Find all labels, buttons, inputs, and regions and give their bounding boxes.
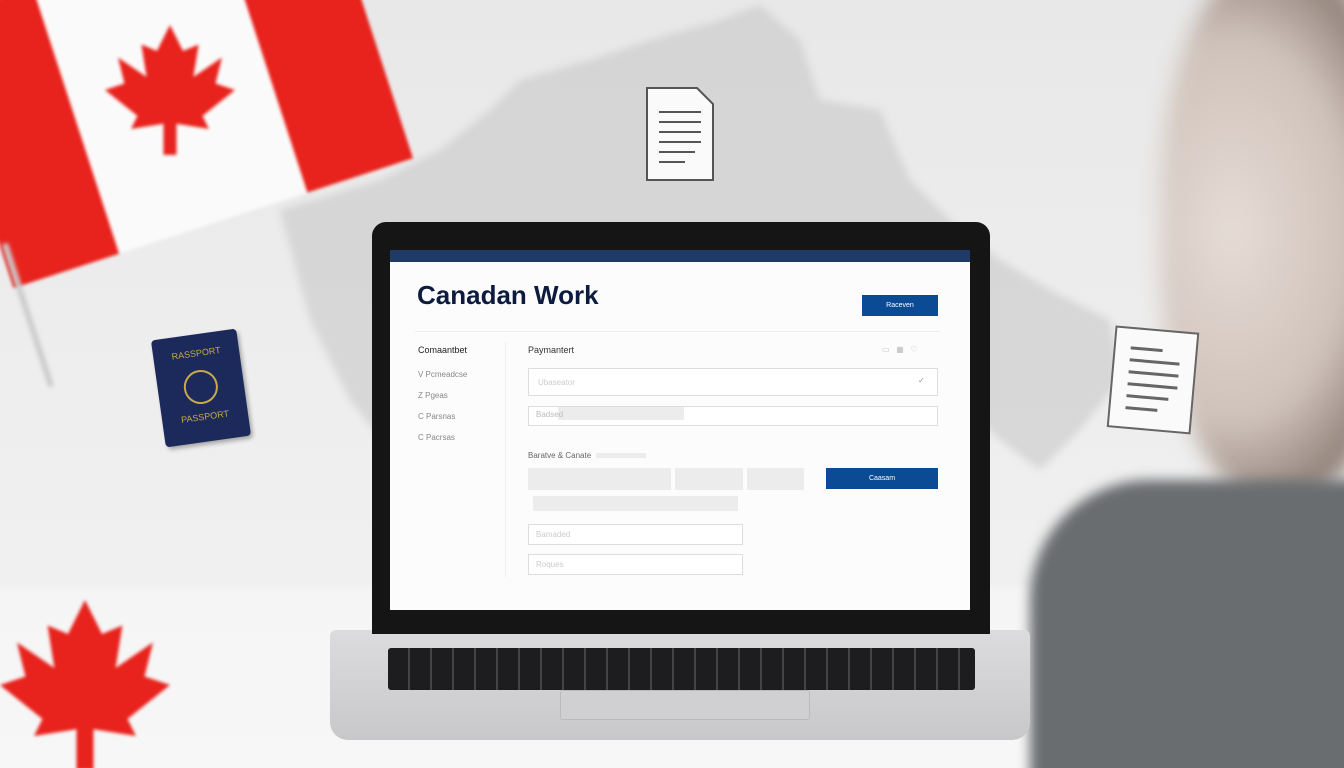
icon: passport: RASSPORT PASSPORT <box>171 345 230 425</box>
button top <box>862 295 938 316</box>
screen: V Pcmeadcse <box>418 370 467 379</box>
screen <box>390 250 970 610</box>
screen: Z Pgeas <box>418 391 448 400</box>
person head <box>1160 0 1344 500</box>
screen: Bamaded <box>536 530 570 539</box>
icon: passport <box>151 329 251 447</box>
person body <box>1030 480 1344 768</box>
screen: C Parsnas <box>418 412 455 421</box>
sidebar: Comaantbet <box>418 345 467 355</box>
button bottom <box>826 468 938 489</box>
icon: document top <box>646 87 714 181</box>
screen: ▭ ▦ ♡ <box>882 345 918 354</box>
laptop bezel <box>372 222 990 634</box>
screen: Roques <box>536 560 564 569</box>
screen: ✓ <box>918 376 925 385</box>
maple leaf bottom left <box>0 598 172 768</box>
flag: Canada <box>0 0 415 290</box>
screen: Ubaseator <box>538 378 575 387</box>
screen: C Pacrsas <box>418 433 455 442</box>
screen: Badsed <box>536 410 563 419</box>
button top: Raceven <box>886 302 914 309</box>
laptop <box>330 222 1030 740</box>
background map <box>280 6 1114 469</box>
icon: document right <box>1106 326 1200 434</box>
laptop base <box>330 630 1030 740</box>
screen title: Canadan Work <box>417 280 599 310</box>
form: Paymantert <box>528 345 574 355</box>
button bottom: Caasam <box>869 475 895 482</box>
screen: Baratve & Canate <box>528 451 591 460</box>
flag pole <box>2 243 54 387</box>
